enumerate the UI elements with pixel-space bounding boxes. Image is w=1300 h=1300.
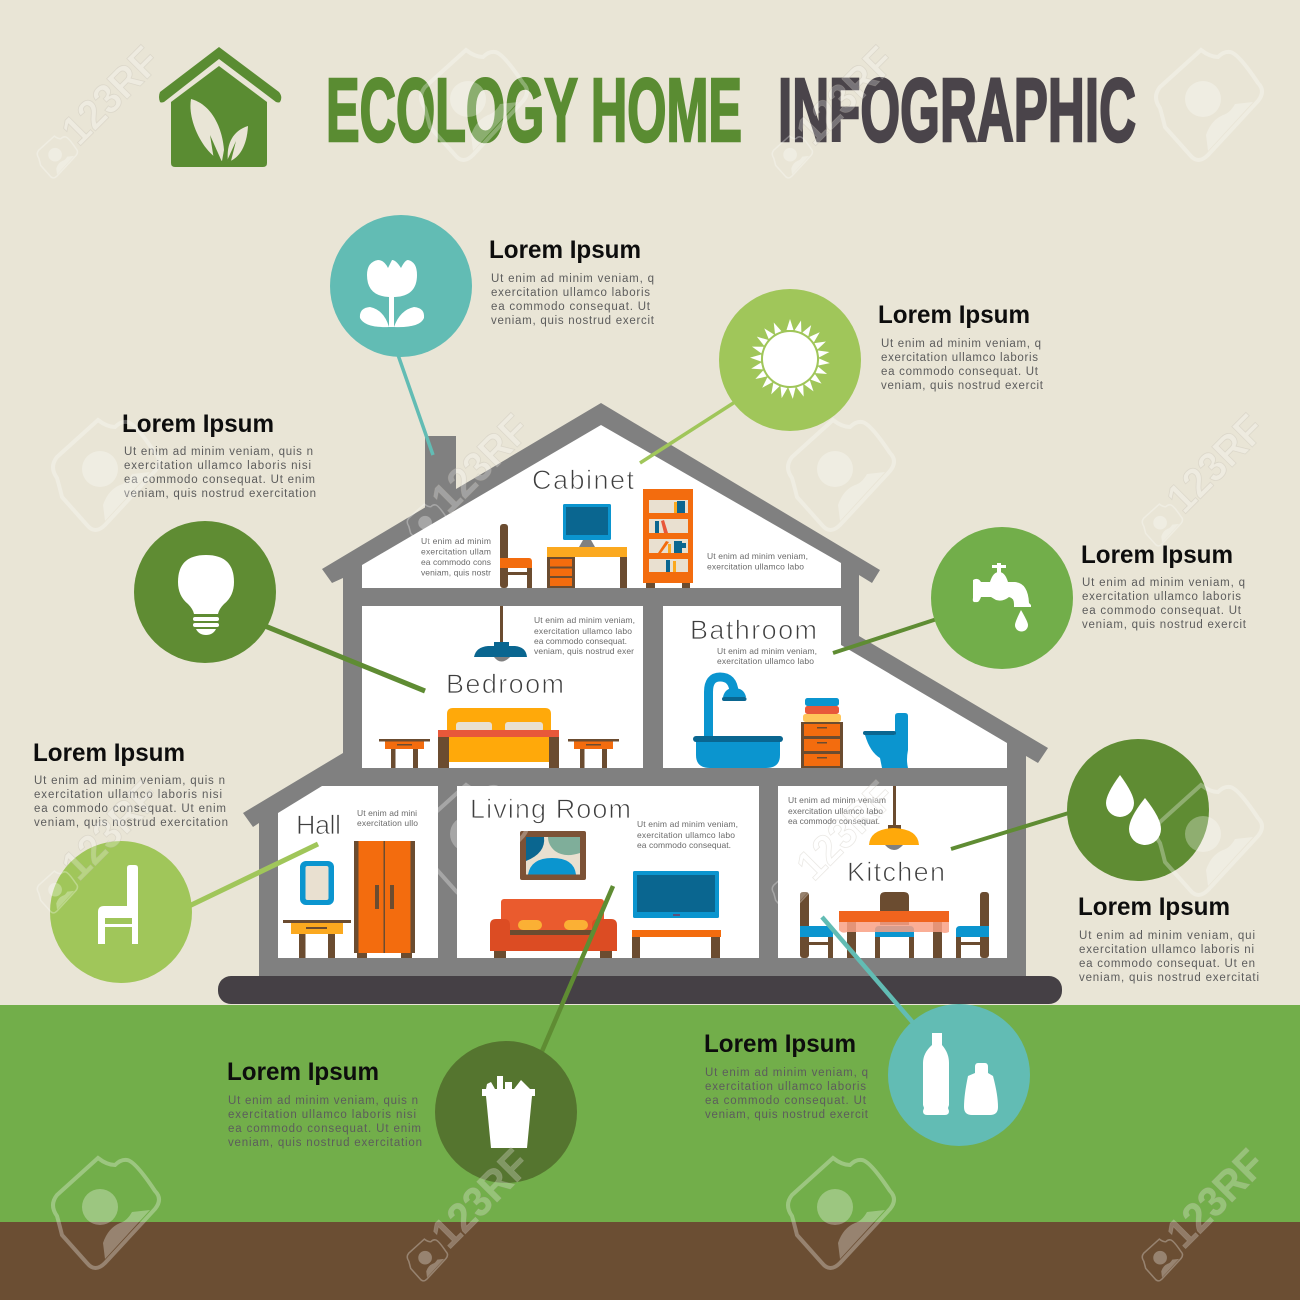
text block: tap: Lorem Ipsum: [1081, 541, 1233, 569]
room captions: Ut enim ad minim veniam: [788, 795, 886, 805]
connector: chair to hall: [185, 844, 318, 908]
icon: sun: [719, 289, 861, 431]
watermark: 123RF: [1157, 405, 1274, 522]
room captions: Ut enim ad mini: [357, 808, 417, 818]
hall furniture: [283, 841, 415, 958]
room labels: Kitchen: [847, 857, 945, 887]
bathtub: [693, 736, 783, 768]
bed: [438, 708, 559, 768]
title: ECOLOGY HOME: [326, 61, 742, 161]
text block: fries: veniam, quis nostrud exercitation: [228, 1137, 422, 1149]
text block: bottles: [704, 1030, 869, 1121]
text block: chair: ea commodo consequat. Ut enim: [34, 803, 226, 815]
sofa: [490, 899, 617, 958]
text block: sun: veniam, quis nostrud exercit: [881, 380, 1044, 392]
room captions: Ut enim ad minim: [421, 536, 491, 546]
icon: chair: [50, 841, 192, 983]
nightstand left: [379, 739, 430, 768]
connector: drops to kitchen: [951, 812, 1072, 849]
room captions: veniam, quis nostr: [421, 568, 491, 578]
room captions: exercitation ullamco labo: [707, 562, 804, 572]
room captions: exercitation ullamco labo: [788, 806, 883, 816]
framed painting: [520, 831, 586, 880]
text block: chair: exercitation ullamco laboris nisi: [34, 789, 222, 801]
text block: fries: [227, 1058, 422, 1149]
room captions: exercitation ullamco labo: [717, 656, 814, 666]
desk: [547, 547, 627, 588]
room labels: [296, 465, 945, 887]
room captions: ea commodo consequat.: [788, 816, 880, 826]
connector: sun to cabinet: [640, 402, 735, 463]
room captions: ea commodo cons: [421, 557, 491, 567]
connector: tap to bathroom: [833, 618, 940, 653]
text block: bulb: veniam, quis nostrud exercitation: [124, 488, 316, 500]
watermark: 123RF: [52, 772, 169, 889]
room: bathroom: [663, 606, 1007, 768]
text block: drops: Lorem Ipsum: [1078, 893, 1230, 921]
room captions: exercitation ullam: [421, 546, 491, 556]
text block: drops: Ut enim ad minim veniam, qui: [1079, 930, 1255, 942]
shower: [708, 677, 746, 740]
room captions: Ut enim ad minim veniam,: [637, 819, 738, 829]
connector: bulb to bedroom: [265, 626, 425, 691]
watermark: 123RF: [52, 37, 169, 154]
connector: fries to living room: [540, 886, 613, 1056]
room labels: Bathroom: [690, 615, 817, 645]
cabinet furniture: [500, 489, 693, 588]
text block: bulb: Lorem Ipsum: [122, 410, 274, 438]
bedroom furniture: [379, 606, 619, 768]
soil: [0, 1222, 1300, 1300]
icon: tulip: [330, 215, 472, 357]
room labels: Living Room: [470, 794, 631, 824]
room captions: exercitation ullamco labo: [534, 626, 632, 636]
text block: drops: ea commodo consequat. Ut en: [1079, 958, 1255, 970]
room captions: Ut enim ad minim veniam,: [717, 646, 817, 656]
room: cabinet: [362, 425, 841, 588]
TV bench: [632, 930, 721, 958]
text block: tap: exercitation ullamco laboris: [1082, 591, 1241, 603]
text block: chair: Ut enim ad minim veniam, quis n: [34, 775, 225, 787]
text block: tulip: exercitation ullamco laboris: [491, 287, 650, 299]
connector: tulip to chimney: [397, 352, 433, 455]
console table: [283, 920, 351, 958]
icon: light bulb: [134, 521, 276, 663]
text block: tap: [1081, 541, 1247, 631]
text block: chair: Lorem Ipsum: [33, 739, 185, 767]
nightstand right: [568, 739, 619, 768]
icon: water drops: [1067, 739, 1209, 881]
computer monitor: [563, 504, 611, 547]
text block: bottles: veniam, quis nostrud exercit: [705, 1109, 869, 1121]
dining table: [839, 911, 949, 958]
right chair: [956, 892, 989, 958]
television: [633, 871, 719, 918]
pendant lamp: [474, 606, 527, 662]
text block: tulip: Ut enim ad minim veniam, q: [491, 273, 654, 285]
text block: tulip: veniam, quis nostrud exercit: [491, 315, 655, 327]
text block: fries: Ut enim ad minim veniam, quis n: [228, 1095, 418, 1107]
pendant lamp: [869, 786, 919, 850]
logo: eco house: [159, 47, 281, 167]
watermark: 123RF: [787, 37, 904, 154]
text block: bottles: exercitation ullamco laboris: [705, 1081, 866, 1093]
room captions: Ut enim ad minim veniam,: [534, 615, 635, 625]
text block: bottles: Lorem Ipsum: [704, 1030, 856, 1058]
connector: bottles to kitchen: [822, 917, 915, 1025]
watermark: 123RF: [787, 772, 904, 889]
room captions: ea commodo consequat.: [534, 636, 627, 646]
watermark: 123RF: [422, 1140, 539, 1257]
text block: sun: ea commodo consequat. Ut: [881, 366, 1039, 378]
room: living room: [457, 786, 759, 958]
lawn: [0, 1005, 1300, 1223]
room: hall: [278, 786, 438, 958]
wardrobe: [354, 841, 415, 958]
text block: tap: Ut enim ad minim veniam, q: [1082, 577, 1245, 589]
text block: bottles: ea commodo consequat. Ut: [705, 1095, 867, 1107]
text block: tulip: Lorem Ipsum: [489, 236, 641, 264]
mirror: [300, 861, 334, 905]
icon: water tap: [931, 527, 1073, 669]
living room furniture: [490, 831, 721, 958]
back chair: [875, 892, 914, 958]
text block: bulb: exercitation ullamco laboris nisi: [124, 460, 311, 472]
room labels: Hall: [296, 810, 341, 840]
room captions: exercitation ullo: [357, 818, 418, 828]
text block: bulb: ea commodo consequat. Ut enim: [124, 474, 315, 486]
room captions: ea commodo consequat.: [637, 840, 731, 850]
chair: [500, 524, 532, 588]
icon: bottles: [888, 1004, 1030, 1146]
icon: fries box: [435, 1041, 577, 1183]
text block: drops: [1078, 893, 1259, 984]
toilet: [863, 713, 908, 768]
text block: drops: veniam, quis nostrud exercitati: [1079, 972, 1259, 984]
text block: bottles: Ut enim ad minim veniam, q: [705, 1067, 868, 1079]
room captions: [357, 536, 886, 850]
text block: tulip: [489, 236, 655, 327]
room labels: Cabinet: [532, 465, 634, 495]
text block: bulb: Ut enim ad minim veniam, quis n: [124, 446, 313, 458]
bookcase: [643, 489, 693, 588]
text block: fries: Lorem Ipsum: [227, 1058, 379, 1086]
text block: fries: exercitation ullamco laboris nisi: [228, 1109, 416, 1121]
text block: drops: exercitation ullamco laboris ni: [1079, 944, 1254, 956]
text block: tap: veniam, quis nostrud exercit: [1082, 619, 1247, 631]
text block: sun: Lorem Ipsum: [878, 301, 1030, 329]
watermark: 123RF: [1157, 1140, 1274, 1257]
watermark: 123RF: [422, 405, 539, 522]
room: kitchen: [778, 786, 1007, 958]
room captions: Ut enim ad minim veniam,: [707, 551, 808, 561]
text block: sun: Ut enim ad minim veniam, q: [881, 338, 1041, 350]
house base: [218, 976, 1062, 1004]
text block: tulip: ea commodo consequat. Ut: [491, 301, 651, 313]
text block: sun: [878, 301, 1044, 392]
text block: bulb: [122, 410, 316, 500]
text block: sun: exercitation ullamco laboris: [881, 352, 1038, 364]
house shell: [243, 403, 1048, 976]
text block: chair: veniam, quis nostrud exercitation: [34, 817, 228, 829]
kitchen furniture: [800, 786, 989, 958]
bathroom furniture: [693, 677, 908, 768]
room captions: veniam, quis nostrud exer: [534, 646, 634, 656]
room: bedroom: [362, 606, 643, 768]
text block: fries: ea commodo consequat. Ut enim: [228, 1123, 421, 1135]
left chair: [800, 892, 833, 958]
towels and drawers: [801, 698, 843, 768]
room labels: Bedroom: [446, 669, 564, 699]
text block: chair: [33, 739, 228, 829]
text block: tap: ea commodo consequat. Ut: [1082, 605, 1242, 617]
room captions: exercitation ullamco labo: [637, 830, 735, 840]
